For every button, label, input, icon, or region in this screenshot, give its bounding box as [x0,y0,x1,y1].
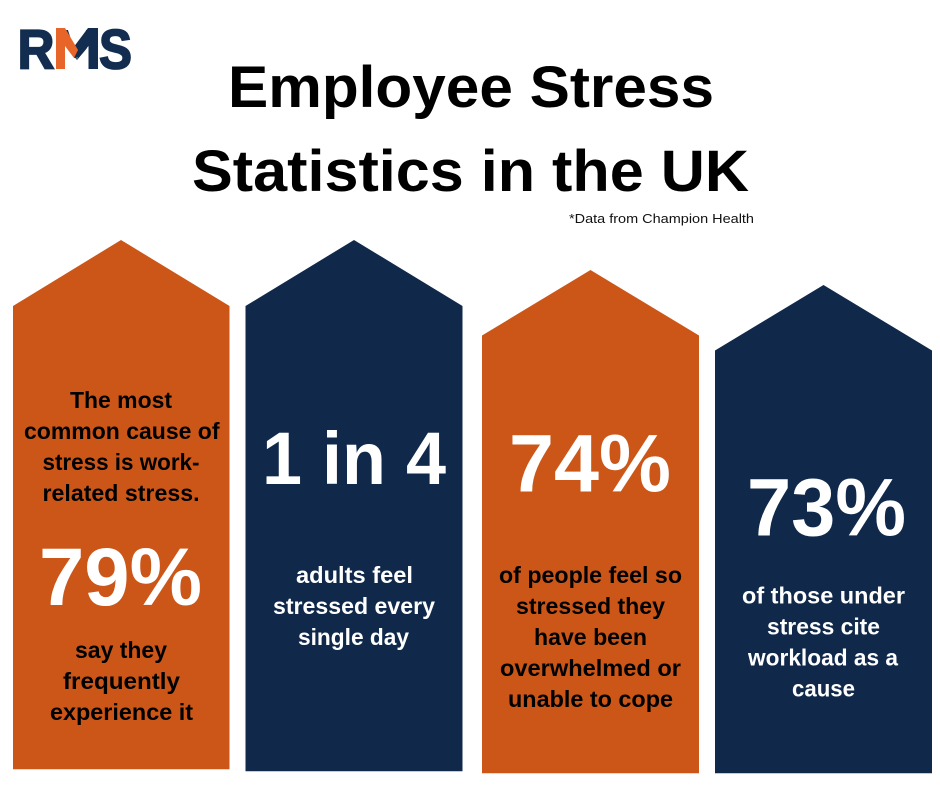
statistic: 79%: 79% [39,532,202,623]
panel: 1 in 4 adults [246,240,462,771]
caption: single day [298,624,409,650]
source note: *Data from Champion Health [569,211,754,226]
intro text: common cause of [24,418,220,444]
caption [50,637,193,725]
caption: frequently [63,668,180,694]
intro text [24,387,220,506]
intro text: related stress. [42,480,200,506]
caption: of those under [742,582,905,608]
logo: RMS: M [53,18,101,82]
title [192,55,749,204]
statistic: 73%: 73% [747,463,906,554]
caption: stressed every [273,593,435,619]
intro text: The most [70,387,172,413]
caption: cause [792,675,855,701]
statistic: 74%: 74% [509,419,671,510]
caption: stressed they [516,593,665,619]
title: Statistics in the UK [192,139,749,204]
caption: of people feel so [499,562,682,588]
panel: work-related stress 79% [13,240,230,769]
statistic: 1 in 4: 1 in 4 [262,417,446,500]
caption [273,562,435,650]
logo: RMS: R [18,18,54,80]
caption: overwhelmed or [500,655,681,681]
caption: stress cite [767,613,880,639]
caption: unable to cope [508,686,673,712]
caption: workload as a [747,644,898,670]
intro text: stress is work- [42,449,200,475]
panel: 74% overwhelmed [482,270,699,773]
caption: have been [534,624,647,650]
logo: RMS: S [99,18,132,80]
caption: experience it [50,699,193,725]
logo: RMS [18,18,132,82]
caption: adults feel [296,562,413,588]
caption [499,562,682,712]
caption [742,582,905,701]
panel: 73% workload [715,285,932,773]
title: Employee Stress [228,55,714,120]
caption: say they [75,637,167,663]
